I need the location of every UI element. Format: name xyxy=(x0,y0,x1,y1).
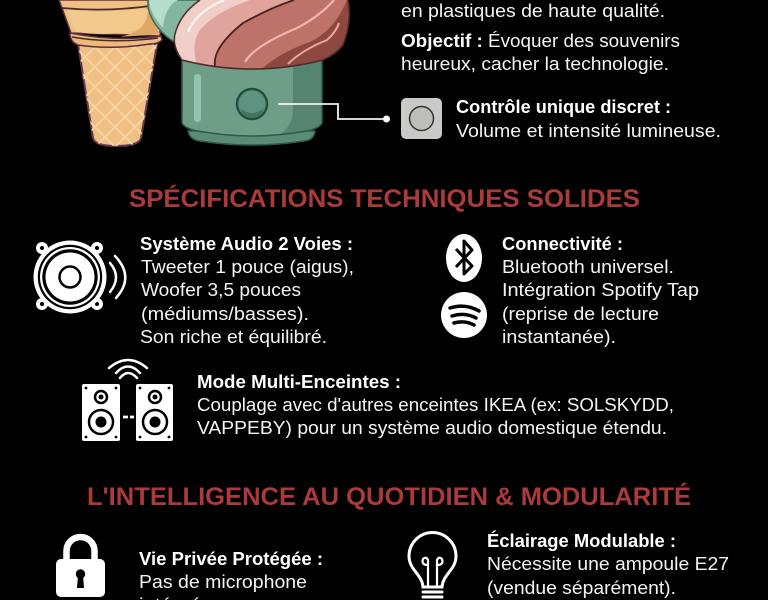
text: privacy xyxy=(139,549,323,600)
illustration: ice cream cone xyxy=(58,0,163,147)
text: modular lighting xyxy=(487,530,729,598)
text: audio system xyxy=(140,234,354,347)
text: audio system: (médiums/basses). xyxy=(141,304,309,324)
text: connectivity: Intégration Spotify Tap xyxy=(502,280,699,300)
icon: paired speakers with wifi xyxy=(82,360,173,441)
text: modular lighting: Éclairage Modulable : xyxy=(487,530,676,551)
text: materials and objective: en plastiques de haute qualité. xyxy=(401,1,665,21)
text: audio system: Tweeter 1 pouce (aigus), xyxy=(141,257,354,277)
heading: technical specs: SPÉCIFICATIONS TECHNIQUES SOLIDES xyxy=(129,184,640,213)
text: privacy: Vie Privée Protégée : xyxy=(139,549,323,569)
icon: speaker driver xyxy=(34,240,125,314)
text: materials and objective: Objectif : Évoquer des souvenirs xyxy=(401,31,680,51)
text: multi-speaker mode: Mode Multi-Enceintes : xyxy=(197,372,401,392)
swirl top xyxy=(174,0,349,69)
text: multi-speaker mode: Couplage avec d'autres enceintes IKEA (ex: SOLSKYDD, xyxy=(197,395,674,415)
icon: control button xyxy=(401,98,442,139)
text: audio system: Woofer 3,5 pouces xyxy=(141,280,301,300)
text: multi-speaker mode: VAPPEBY) pour un système audio domestique étendu. xyxy=(197,418,667,438)
leader line xyxy=(278,104,390,122)
button xyxy=(237,89,267,119)
text: connectivity: instantanée). xyxy=(502,327,616,347)
text: multi-speaker mode xyxy=(197,372,674,438)
text: connectivity: (reprise de lecture xyxy=(502,304,659,324)
text: audio system: Son riche et équilibré. xyxy=(140,327,327,347)
text: single control: Volume et intensité lumineuse. xyxy=(456,121,721,141)
illustration: ice cream speaker xyxy=(148,0,356,145)
heading: everyday intelligence: L'INTELLIGENCE AU QUOTIDIEN & MODULARITÉ xyxy=(87,482,691,511)
text: single control: Contrôle unique discret : xyxy=(456,97,671,117)
mint swirl behind xyxy=(148,0,205,43)
icon: light bulb xyxy=(409,532,456,597)
text: materials and objective xyxy=(401,1,680,74)
text: connectivity: Connectivité : xyxy=(502,234,623,254)
text: modular lighting: (vendue séparément). xyxy=(487,578,676,598)
icon: spotify xyxy=(441,292,487,338)
icon: bluetooth xyxy=(446,234,482,282)
text: modular lighting: Nécessite une ampoule E27 xyxy=(487,554,729,574)
speaker base xyxy=(188,131,315,145)
text: materials and objective: heureux, cacher la technologie. xyxy=(401,54,669,74)
text: privacy: Pas de microphone xyxy=(139,572,307,592)
text: connectivity: Bluetooth universel. xyxy=(502,257,674,277)
icon: padlock xyxy=(56,537,105,597)
text: connectivity xyxy=(502,234,699,347)
text: audio system: Système Audio 2 Voies : xyxy=(140,234,353,254)
text: single control xyxy=(456,97,721,141)
